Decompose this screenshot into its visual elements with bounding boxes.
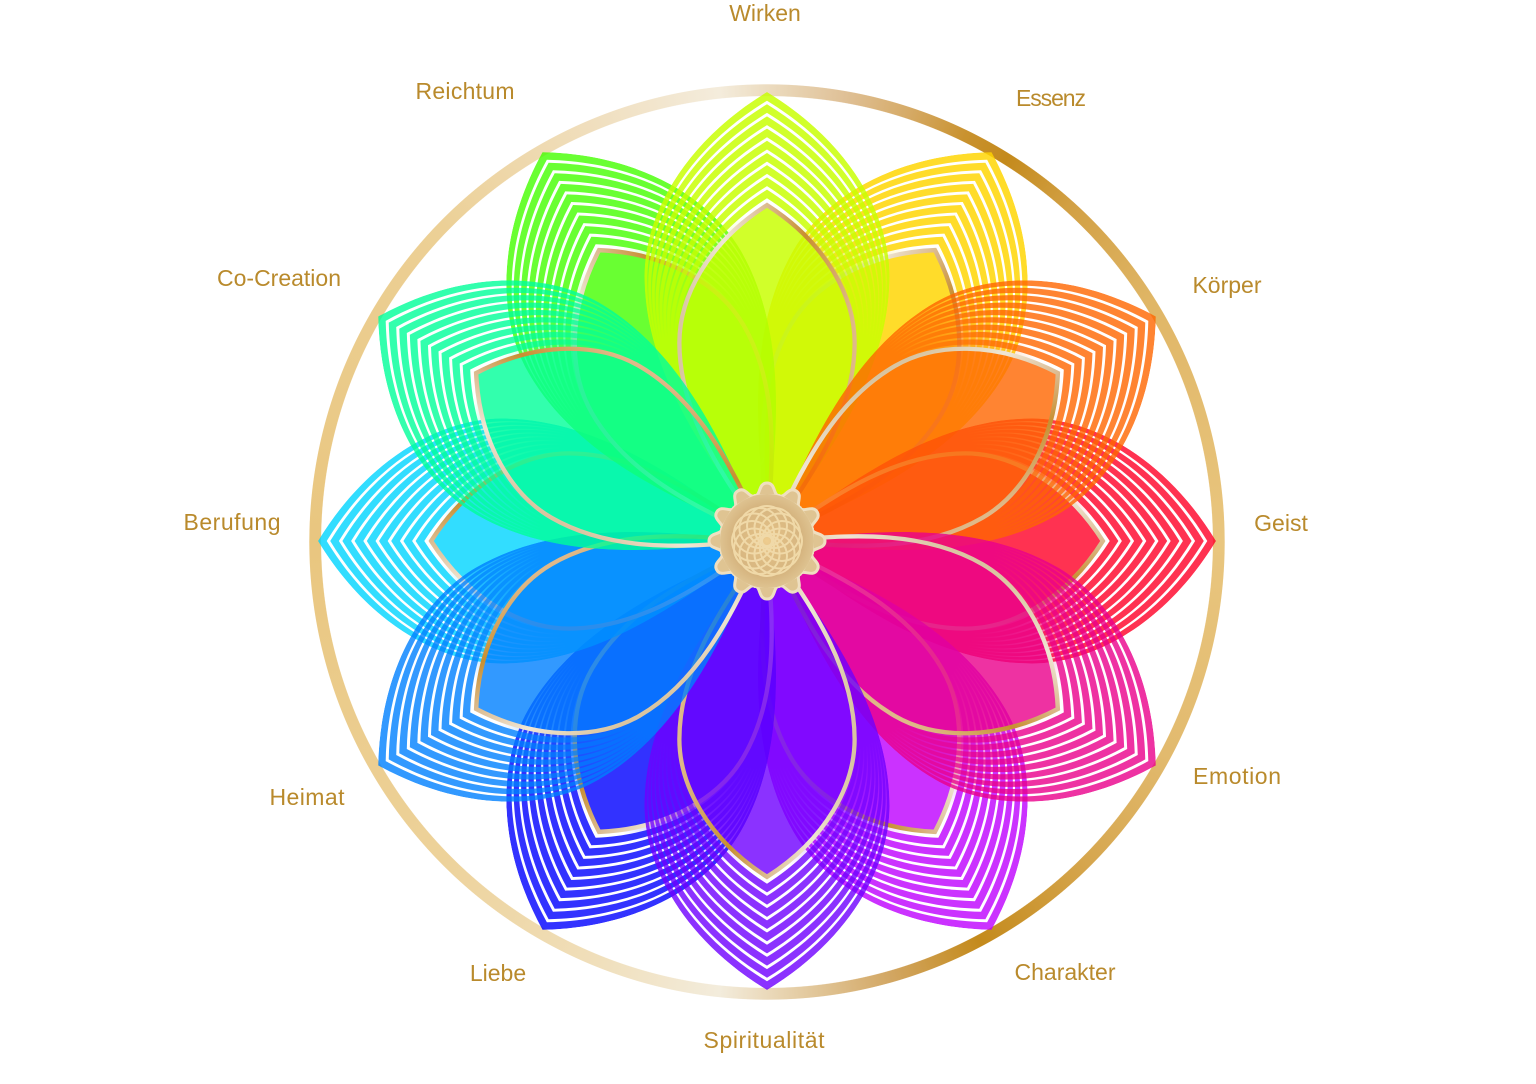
petal: Spiritualität: [644, 541, 890, 990]
petal: Heimat: [317, 435, 828, 872]
icon: golden centre rosette: [709, 483, 825, 599]
petal: Essenz: [661, 91, 1098, 602]
label: Essenz: Essenz: [1016, 85, 1086, 111]
label: Emotion: Emotion: [1193, 763, 1281, 789]
label: Reichtum: Reichtum: [416, 78, 514, 104]
label: Co-Creation: Co-Creation: [217, 265, 341, 291]
petal layer: lower six petals: [318, 91, 1216, 991]
label: Liebe: Liebe: [470, 960, 526, 986]
petal: Co-Creation: [317, 210, 828, 647]
petal: Wirken: [644, 92, 890, 541]
label: Heimat: Heimat: [270, 784, 345, 810]
petal layer: upper six petals: [317, 92, 1217, 990]
petal: Berufung: [318, 418, 767, 664]
label: Spiritualität: Spiritualität: [704, 1027, 825, 1053]
label: Körper: Körper: [1192, 272, 1262, 298]
label: Berufung: Berufung: [184, 509, 280, 535]
petal: Körper: [706, 210, 1217, 647]
petal: Emotion: [706, 435, 1217, 872]
label: Geist: Geist: [1254, 510, 1308, 536]
label: Charakter: Charakter: [1015, 959, 1116, 985]
label: Wirken: Wirken: [729, 0, 801, 26]
petal: Reichtum: [436, 91, 873, 602]
petal: Geist: [767, 418, 1216, 664]
outer gold ring: [309, 84, 1225, 1000]
petal: Liebe: [436, 480, 873, 991]
petal: Charakter: [661, 480, 1098, 991]
